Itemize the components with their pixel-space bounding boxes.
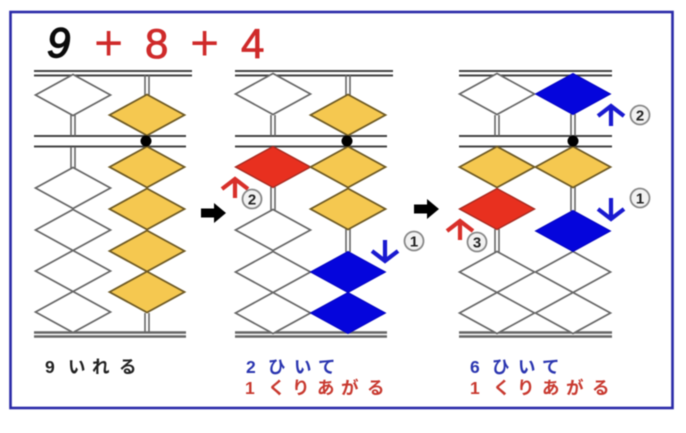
title: 9 + 8 + 4 xyxy=(47,15,264,71)
blue down arrow with circled 1: 1 xyxy=(636,190,644,208)
blue up arrow with circled 2 xyxy=(598,106,650,126)
white beads xyxy=(236,74,310,334)
red up arrow with circled 3 xyxy=(447,221,486,252)
gold beads, right rod xyxy=(110,94,184,312)
blue down arrow with circled 1 xyxy=(598,188,650,219)
arrow: step 1 to 2 xyxy=(201,203,226,223)
title: 9 + 8 + 4: 4 xyxy=(241,20,264,67)
gold beads xyxy=(460,146,610,188)
red up arrow with circled 3: 3 xyxy=(473,234,481,252)
blue down arrow with circled 1: 1 xyxy=(410,234,418,250)
unit dot xyxy=(342,136,352,146)
caption: step 2: 2ひいて xyxy=(246,357,336,377)
red up arrow with circled 2 xyxy=(222,179,262,208)
blue beads xyxy=(310,252,386,334)
red up arrow with circled 2: 2 xyxy=(248,192,256,208)
red bead xyxy=(460,188,534,230)
caption: step 2 xyxy=(245,357,384,398)
red bead xyxy=(236,146,310,188)
white beads xyxy=(460,74,610,334)
unit dot xyxy=(568,136,578,146)
caption: step 3: 1くりあがる xyxy=(470,378,610,398)
title: 9 + 8 + 4: 9 xyxy=(47,19,70,66)
gold beads xyxy=(310,94,386,230)
blue up arrow with circled 2: 2 xyxy=(636,108,644,124)
caption: step 3: 6ひいて xyxy=(470,357,560,377)
title: 9 + 8 + 4: + xyxy=(94,15,123,71)
abacus 2 xyxy=(235,71,393,336)
caption: step 3 xyxy=(470,357,610,398)
abacus 1 xyxy=(34,71,192,336)
caption: step 1: 9いれる xyxy=(45,357,136,377)
title: 9 + 8 + 4: 8 xyxy=(145,20,168,67)
abacus 3 xyxy=(459,71,612,336)
white beads, left rod xyxy=(36,74,110,332)
blue down arrow with circled 1 xyxy=(372,232,424,261)
unit dot xyxy=(140,136,152,146)
blue beads xyxy=(536,74,610,252)
title: 9 + 8 + 4: + xyxy=(190,15,219,71)
arrow: step 2 to 3 xyxy=(414,199,439,219)
caption: step 2: 1くりあがる xyxy=(245,378,384,398)
